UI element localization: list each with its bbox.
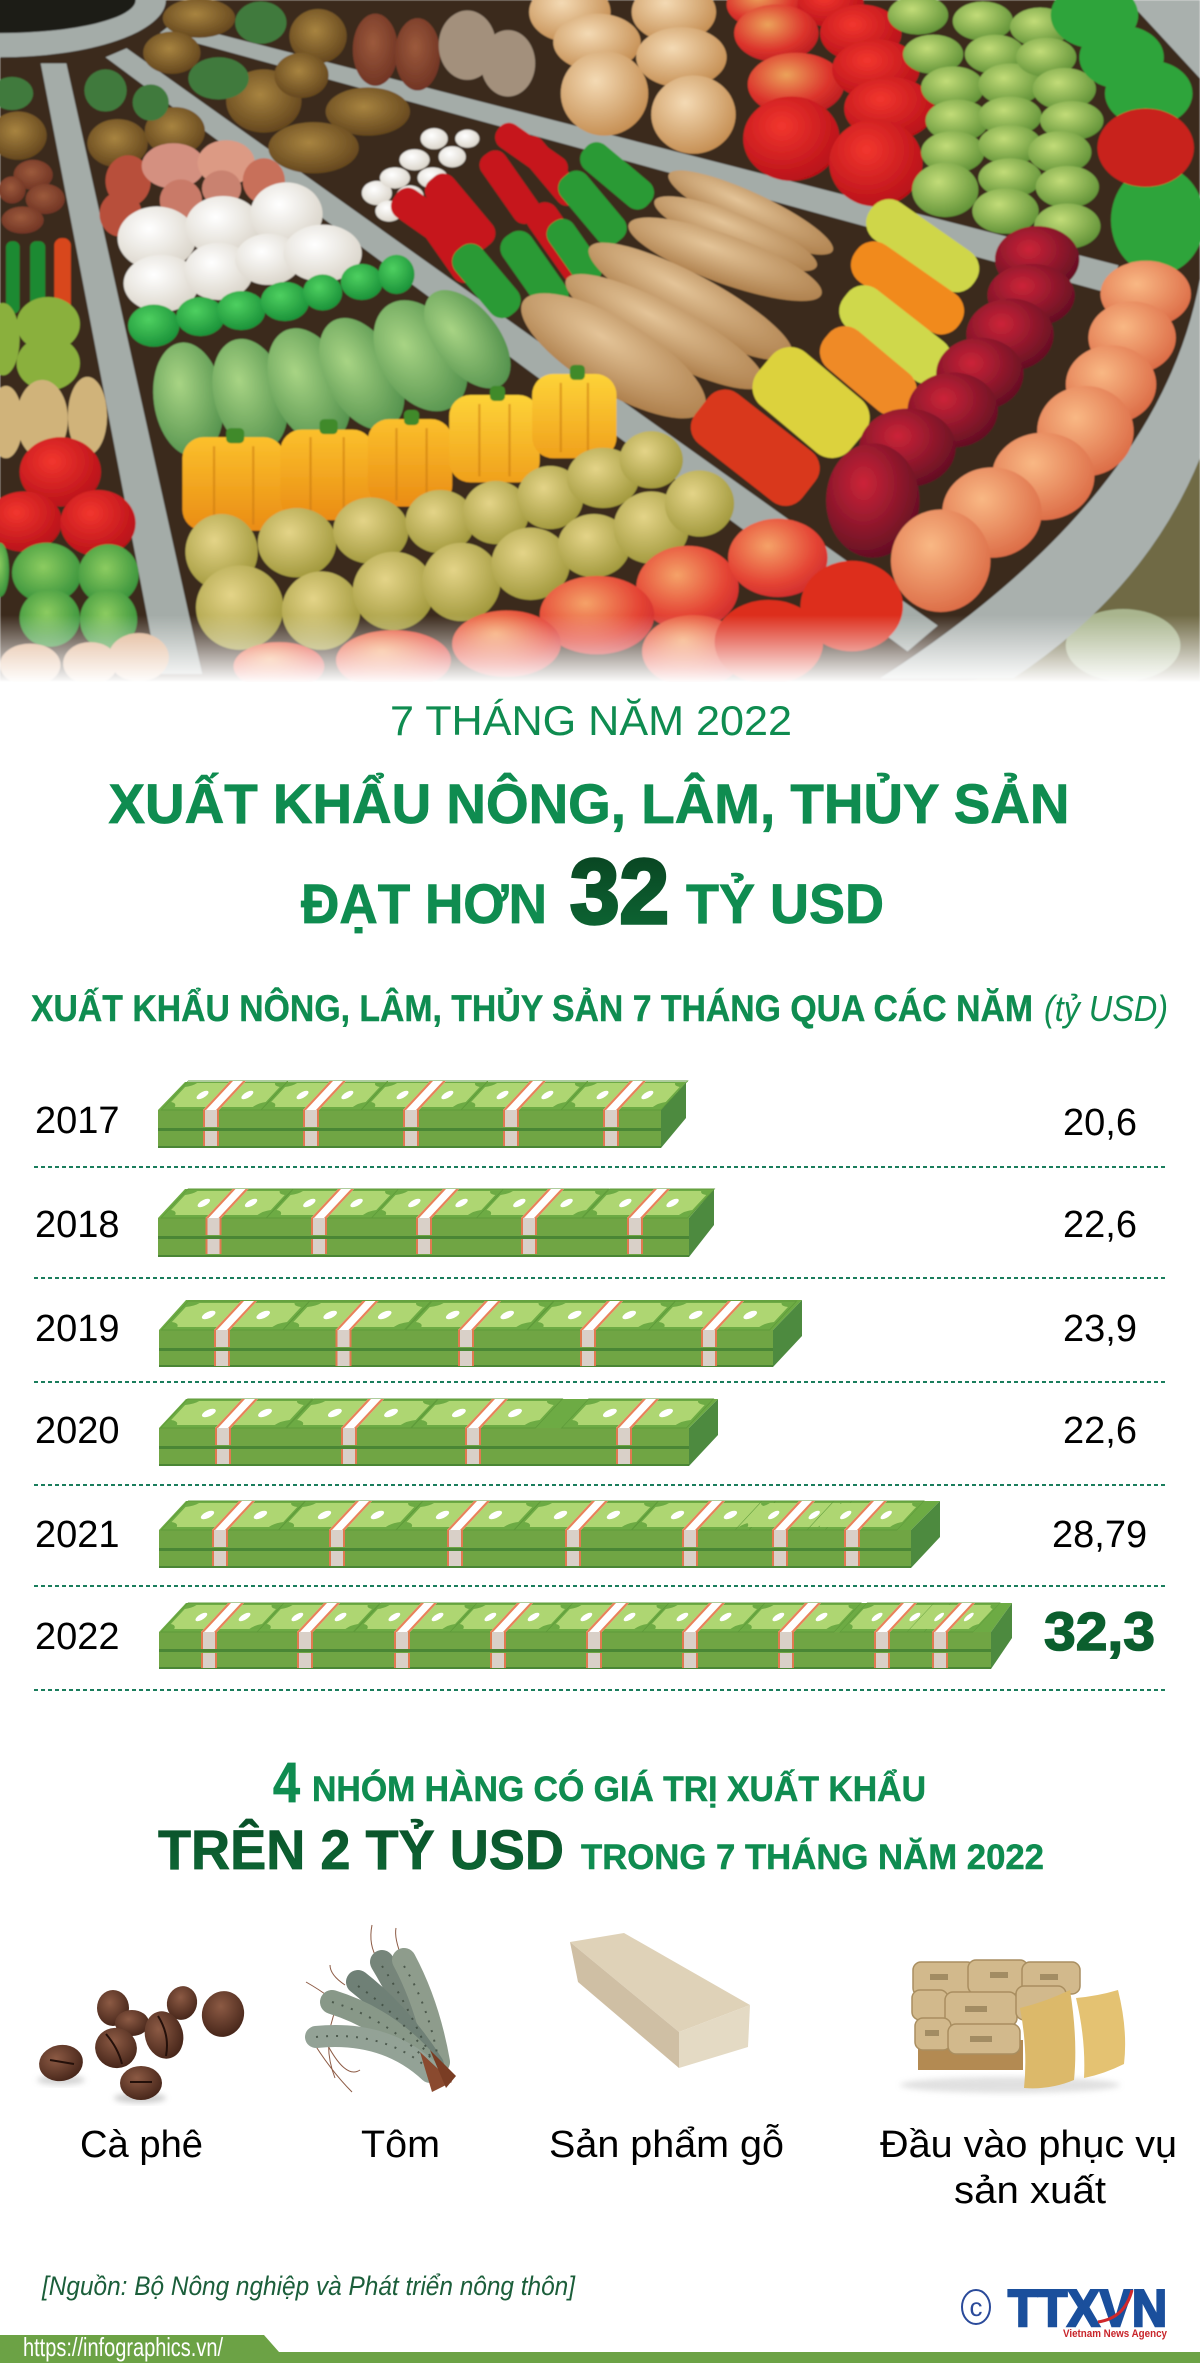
logo: TTXVN: TTXVN (1008, 2280, 1167, 2338)
title: TỶ USD (686, 872, 884, 935)
section heading: four product groups: TRÊN 2 TỶ USD (158, 1818, 564, 1881)
footer strip with URL: https://infographics.vn/ (23, 2332, 224, 2362)
row dividers (34, 1167, 1166, 1690)
row 2020 (35, 1399, 1137, 1466)
row 2019: 2019 (35, 1308, 120, 1350)
row 2022: 32,3 (1044, 1602, 1155, 1662)
row 2019: 23,9 (1063, 1308, 1137, 1350)
row 2018: 2018 (35, 1204, 120, 1246)
logo: TTXVN: Vietnam News Agency (1063, 2328, 1168, 2340)
section heading: four product groups: NHÓM HÀNG CÓ GIÁ TRỊ XUẤT KHẨU (312, 1769, 926, 1809)
title: 7 THÁNG NĂM 2022 (390, 697, 792, 744)
row 2017 (35, 1081, 1137, 1148)
icon: coffee beans (36, 1983, 249, 2103)
row 2021 (35, 1501, 1147, 1568)
item labels: Cà phê (80, 2124, 203, 2166)
section heading: four product groups: TRONG 7 THÁNG NĂM 2022 (581, 1837, 1044, 1877)
logo: TTXVN: c (970, 2292, 982, 2322)
source note: [Nguồn: Bộ Nông nghiệp và Phát triển nông thôn] (41, 2271, 576, 2301)
icon: shrimp (306, 1925, 456, 2092)
section heading: four product groups: 4 (273, 1751, 300, 1815)
photo fade (0, 615, 1200, 683)
title: 32 (570, 841, 669, 943)
row 2017: 20,6 (1063, 1102, 1137, 1144)
icon: cement sacks on pallet (900, 1960, 1125, 2093)
chart heading: (tỷ USD) (1044, 988, 1168, 1029)
title (108, 697, 1070, 943)
row 2018 (35, 1189, 1137, 1257)
row 2018: 22,6 (1063, 1204, 1137, 1246)
row 2021: 28,79 (1052, 1514, 1147, 1556)
row 2020: 2020 (35, 1410, 120, 1452)
title: ĐẠT HƠN (301, 872, 547, 935)
row 2022: 2022 (35, 1616, 120, 1658)
row 2017: 2017 (35, 1100, 120, 1142)
row 2019 (35, 1300, 1137, 1367)
section heading: four product groups (158, 1751, 1044, 1881)
row 2022 (35, 1602, 1155, 1669)
footer strip with URL (0, 2332, 1200, 2363)
title: XUẤT KHẨU NÔNG, LÂM, THỦY SẢN (108, 772, 1070, 835)
row 2021: 2021 (35, 1514, 120, 1556)
bar chart: money stacks by year (35, 1081, 1155, 1669)
item labels: Tôm (361, 2124, 440, 2166)
item labels: Sản phẩm gỗ (549, 2123, 784, 2166)
hero photo: vegetable and fruit display (0, 0, 1200, 702)
item labels: sản xuất (954, 2170, 1106, 2212)
item labels: Đầu vào phục vụ (880, 2124, 1177, 2166)
item labels (80, 2123, 1177, 2212)
icon: wood block (570, 1933, 750, 2068)
chart heading: XUẤT KHẨU NÔNG, LÂM, THỦY SẢN 7 THÁNG QUA CÁC NĂM (31, 987, 1033, 1029)
row 2020: 22,6 (1063, 1410, 1137, 1452)
